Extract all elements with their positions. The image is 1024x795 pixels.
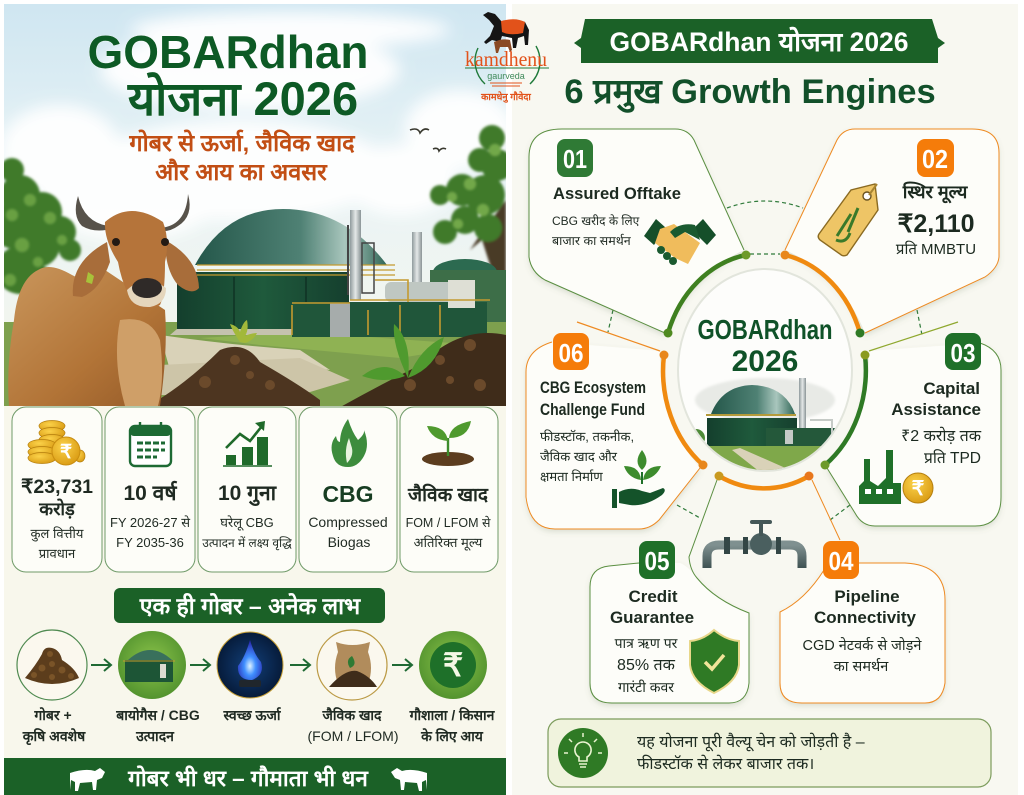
card 06: ecosystem challenge fund xyxy=(526,322,700,529)
step: organic fertilizer bag: (FOM / LFOM) xyxy=(308,728,398,744)
stacks and pipework xyxy=(350,210,361,300)
card 01: assured offtake xyxy=(529,129,744,333)
process flow xyxy=(17,630,496,746)
step: biogas: बायोगैस / CBG xyxy=(115,707,200,723)
icon: price tag xyxy=(818,184,878,256)
card: total outlay: करोड़ xyxy=(38,498,76,519)
card 03: capital assistance: Assistance xyxy=(891,400,981,419)
card 01: assured offtake: Assured Offtake xyxy=(553,184,681,203)
callout: value chain note: यह योजना पूरी वैल्यू चेन को जोड़ती है – xyxy=(637,732,865,752)
card 05: credit guarantee: Credit xyxy=(628,587,678,606)
card: total outlay: ₹23,731 xyxy=(21,476,93,498)
cow xyxy=(8,194,199,406)
icon: factory and coin: ₹ xyxy=(912,478,925,500)
logo: Kamdhenu Gauveda: कामधेनु गौवेदा xyxy=(480,91,531,103)
card: total outlay xyxy=(12,407,102,572)
birds xyxy=(410,129,446,151)
card 03: capital assistance xyxy=(827,322,1001,526)
card: ten years: FY 2035-36 xyxy=(116,535,184,550)
footer banner xyxy=(4,758,506,795)
subtitle: और आय का अवसर xyxy=(155,158,328,185)
icon: gold coins xyxy=(28,420,85,465)
central hub: ring and plant: GOBARdhan xyxy=(698,314,832,345)
arrow xyxy=(392,659,412,671)
card 04: pipeline connectivity: Pipeline xyxy=(834,587,900,606)
step: income: के लिए आय xyxy=(420,728,484,744)
step: income: ₹ xyxy=(443,647,463,683)
card: organic fertilizer: FOM / LFOM से xyxy=(406,515,491,530)
central hub: ring and plant: 2026 xyxy=(732,345,798,378)
panel: left poster background xyxy=(4,4,506,795)
plant picture xyxy=(695,378,835,470)
card 05: credit guarantee: गारंटी कवर xyxy=(618,679,674,695)
card 02: fixed price xyxy=(785,129,999,333)
card 05: credit guarantee: 05 xyxy=(644,546,670,576)
back dome xyxy=(433,259,496,270)
stat cards row xyxy=(12,407,498,572)
card: organic fertilizer: अतिरिक्त मूल्य xyxy=(414,535,483,551)
footer banner: गोबर भी धर – गौमाता भी धन xyxy=(127,765,369,791)
step: organic fertilizer bag xyxy=(308,630,398,744)
subtitle xyxy=(128,129,356,185)
step: biogas: उत्पादन xyxy=(135,728,175,744)
step: dung xyxy=(17,630,87,746)
card: ten-fold growth: 10 गुना xyxy=(218,482,278,507)
icon: cow right xyxy=(391,768,427,791)
title xyxy=(88,26,368,125)
hero illustration: biogas plant landscape xyxy=(0,4,515,412)
icon: factory and coin xyxy=(859,450,933,504)
card: CBG: Compressed xyxy=(308,514,388,530)
plant sprouts xyxy=(230,320,257,343)
icon: green flame xyxy=(332,419,367,467)
card 02: fixed price: स्थिर मूल्य xyxy=(902,181,969,204)
card 02: fixed price: प्रति MMBTU xyxy=(896,240,976,258)
ground xyxy=(4,322,506,412)
step: organic fertilizer bag: जैविक खाद xyxy=(322,707,382,723)
card 02: fixed price: 02 xyxy=(922,144,948,174)
card 04: pipeline connectivity: 04 xyxy=(828,546,854,576)
callout: value chain note: फीडस्टॉक से लेकर बाजार तक। xyxy=(637,754,814,773)
card 06: ecosystem challenge fund: फीडस्टॉक, तकनीक, xyxy=(540,429,634,444)
card: ten years: FY 2026-27 से xyxy=(110,515,190,530)
card: organic fertilizer xyxy=(400,407,498,572)
arrow xyxy=(290,659,310,671)
step: biogas xyxy=(115,631,200,744)
banner: GOBARdhan yojana ribbon: GOBARdhan योजना 2026 xyxy=(609,26,909,57)
card 01: assured offtake: 01 xyxy=(563,144,587,174)
card 05: credit guarantee: 85% तक xyxy=(617,657,676,674)
card 06: ecosystem challenge fund: जैविक खाद और xyxy=(540,449,618,464)
card 01: assured offtake: बाजार का समर्थन xyxy=(552,233,632,248)
ring segments xyxy=(663,255,866,488)
step: income xyxy=(409,631,496,744)
icon: cow left xyxy=(70,768,105,791)
heading: one dung many benefits xyxy=(114,588,385,623)
logo: Kamdhenu Gauveda: kamdhenu xyxy=(465,47,547,71)
card: CBG: Biogas xyxy=(328,534,370,550)
card: ten years xyxy=(105,407,195,572)
card 02: fixed price: ₹2,110 xyxy=(897,210,975,238)
callout: value chain note xyxy=(548,719,991,787)
icon: growth chart xyxy=(223,421,272,466)
card: total outlay: प्रावधान xyxy=(39,546,76,561)
card 06: ecosystem challenge fund: 06 xyxy=(558,338,584,368)
card: total outlay: कुल वित्तीय xyxy=(31,526,84,542)
card 03: capital assistance: प्रति TPD xyxy=(924,449,981,467)
logo: Kamdhenu Gauveda: gaurveda xyxy=(487,71,525,81)
main dome tank xyxy=(195,209,387,265)
card 05: credit guarantee: Guarantee xyxy=(610,608,694,627)
card 01: assured offtake: CBG खरीद के लिए xyxy=(552,214,640,228)
logo: Kamdhenu Gauveda xyxy=(465,12,549,103)
card 06: ecosystem challenge fund: क्षमता निर्माण xyxy=(540,469,603,484)
card 05: credit guarantee: पात्र ऋण पर xyxy=(615,635,678,651)
heading: one dung many benefits: एक ही गोबर – अनेक लाभ xyxy=(139,592,361,619)
step: clean energy: स्वच्छ ऊर्जा xyxy=(222,707,282,723)
card 03: capital assistance: ₹2 करोड़ तक xyxy=(901,426,982,445)
central hub: ring and plant xyxy=(660,250,870,488)
card 06: ecosystem challenge fund: CBG Ecosystem xyxy=(540,378,646,397)
card 04: pipeline connectivity: का समर्थन xyxy=(834,658,889,675)
step: clean energy xyxy=(217,632,283,723)
icon: sprout on soil xyxy=(422,421,474,466)
icon: pipeline valve xyxy=(707,520,802,568)
title: योजना 2026 xyxy=(127,72,358,125)
title: GOBARdhan xyxy=(88,26,368,78)
card 04: pipeline connectivity xyxy=(780,480,945,703)
icon: light bulb xyxy=(558,728,608,778)
step: income: गौशाला / किसान xyxy=(409,707,496,723)
card: ten-fold growth: उत्पादन में लक्ष्य वृद्धि xyxy=(202,536,292,551)
step: dung: गोबर + xyxy=(33,707,72,723)
card: ten-fold growth: घरेलू CBG xyxy=(220,515,274,531)
arrow xyxy=(91,659,111,671)
icon: gold coins: ₹ xyxy=(60,442,72,463)
compost piles xyxy=(158,347,320,410)
banner: GOBARdhan yojana ribbon xyxy=(574,19,945,63)
panel: right poster background xyxy=(512,4,1018,795)
card: ten years: 10 वर्ष xyxy=(123,480,177,505)
card: CBG: CBG xyxy=(322,481,374,507)
card 05: credit guarantee xyxy=(590,480,749,703)
step: dung: कृषि अवशेष xyxy=(22,728,86,746)
card: organic fertilizer: जैविक खाद xyxy=(407,483,489,506)
icon: calendar xyxy=(130,422,171,466)
card 03: capital assistance: 03 xyxy=(950,338,976,368)
card 04: pipeline connectivity: CGD नेटवर्क से जोड़ने xyxy=(803,637,922,654)
icon: plant in hand xyxy=(612,450,665,508)
right tree xyxy=(428,123,506,270)
card: ten-fold growth xyxy=(198,407,296,572)
subtitle: गोबर से ऊर्जा, जैविक खाद xyxy=(128,129,356,156)
arrow xyxy=(190,659,210,671)
card 04: pipeline connectivity: Connectivity xyxy=(814,608,917,627)
heading: six growth engines: 6 प्रमुख Growth Engines xyxy=(564,73,936,113)
card 03: capital assistance: Capital xyxy=(923,379,980,398)
left tree xyxy=(0,158,81,300)
card: CBG xyxy=(299,407,397,572)
icon: handshake xyxy=(644,219,716,265)
icon: shield xyxy=(690,630,739,693)
young plant xyxy=(362,324,444,380)
card 06: ecosystem challenge fund: Challenge Fund xyxy=(540,400,645,419)
dashed connectors xyxy=(608,201,922,520)
